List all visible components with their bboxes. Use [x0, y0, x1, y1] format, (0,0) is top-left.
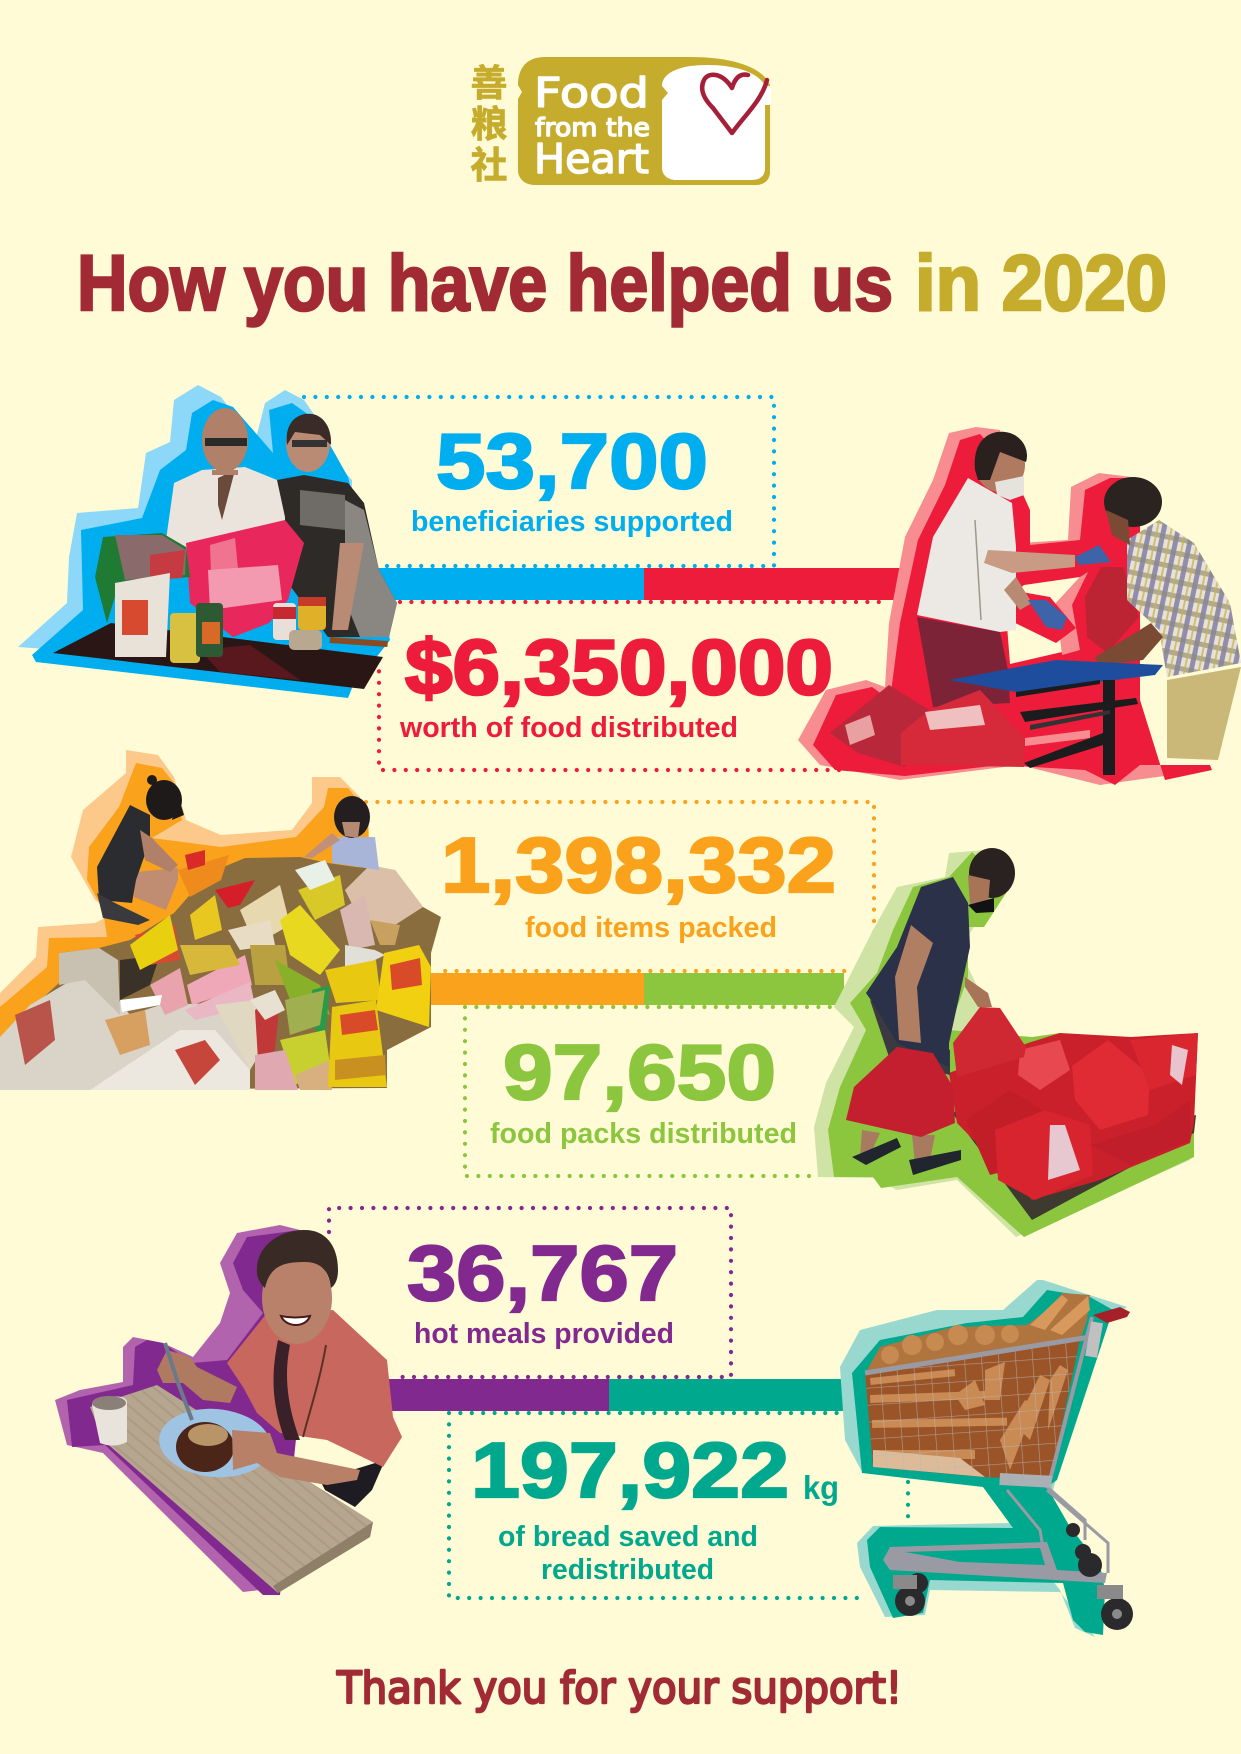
photo: couple with food bag on blue backing: [18, 385, 397, 698]
title: in 2020: [915, 238, 1167, 327]
logo: Food from the Heart: [470, 53, 771, 189]
woman: [277, 475, 397, 637]
lower dark clothing: [320, 1460, 385, 1507]
panel: $6,350,000 food: [379, 602, 880, 770]
kneeling woman: [134, 868, 178, 910]
closing message: Thank you for your support!: [336, 1663, 902, 1714]
smile: [281, 1316, 310, 1325]
pile base: [0, 857, 441, 1090]
bread on top: [865, 1293, 1090, 1373]
arms: [232, 1430, 360, 1485]
reaching woman: [332, 837, 379, 870]
man head and mask: [969, 848, 1015, 898]
trolley frame: [865, 1317, 1108, 1573]
carried bag: [1085, 567, 1139, 653]
panel: 36,767 hot meals: [329, 1208, 731, 1377]
stat label: beneficiaries: beneficiaries supported: [411, 506, 733, 538]
stat label: food value: worth of food distributed: [399, 712, 738, 744]
photo: volunteers handing over food bag on red backing: [798, 427, 1241, 785]
bread in basket: [865, 1340, 1080, 1480]
volunteer head: [975, 438, 1025, 492]
lanyard and apron: [274, 1340, 300, 1440]
recipient shirt: [1127, 520, 1241, 677]
stat number: beneficiaries: 53,700: [436, 417, 708, 505]
table: [949, 660, 1163, 692]
background gap between the two figures: [1005, 577, 1080, 664]
face: [262, 1252, 332, 1344]
stat label: food packs: food packs distributed: [490, 1118, 797, 1150]
shorts and shirt: [870, 1000, 950, 1075]
food bags on floor: [830, 685, 929, 767]
shoes: [852, 1138, 901, 1165]
section 1 connector bar: blue and red: [375, 568, 904, 600]
panel: 53,700 beneficiaries: [304, 397, 774, 566]
food items: [95, 533, 190, 623]
wire mesh: [865, 1340, 1080, 1480]
plastic bags: [0, 975, 250, 1090]
section 3 connector bar: purple and teal: [385, 1379, 845, 1411]
title: How you have helped us: [77, 238, 893, 327]
logo: chinese name: 粮: [470, 94, 508, 148]
photo: shopping trolley full of bread on teal backing: [840, 1280, 1133, 1637]
wheels: [895, 1523, 1133, 1630]
stat number: food value: $6,350,000: [405, 623, 833, 711]
stat number: bread: 197,922: [471, 1426, 789, 1514]
logo: heart: [702, 75, 767, 133]
colourful items: [120, 955, 160, 1000]
pink bag: [186, 520, 304, 637]
volunteer arm and glove: [984, 550, 1075, 573]
trolley handle: [1093, 1307, 1130, 1323]
carried red bags: [846, 1047, 955, 1137]
logo: chinese name: 善: [470, 53, 508, 107]
stat label: bread: [498, 1521, 758, 1586]
man arms: [895, 925, 933, 1043]
stat label: bread: of bread saved and: [498, 1521, 758, 1553]
stat label: food items: food items packed: [525, 912, 777, 944]
panel: 1,398,332 food items: [366, 802, 874, 971]
logo: wordmark: Heart: [534, 135, 649, 183]
stat unit: kg: kg: [803, 1469, 839, 1506]
man: [166, 467, 285, 560]
table: [53, 623, 383, 689]
plate of food: [156, 1404, 274, 1482]
stat number: hot meals: 36,767: [407, 1229, 678, 1317]
logo: wordmark: from the: [535, 113, 650, 142]
stat number: food items: 1,398,332: [441, 821, 836, 909]
yellow boxes: [325, 960, 381, 1003]
man legs: [860, 1130, 880, 1158]
recipient head: [1104, 477, 1162, 527]
mug: [92, 1396, 127, 1446]
photo: smiling woman eating a hot meal on purple backing: [55, 1225, 402, 1595]
fork: [165, 1343, 192, 1420]
stat number: food packs: 97,650: [503, 1028, 776, 1116]
stacked bags: [949, 1033, 1198, 1200]
logo: wordmark: Food: [534, 69, 649, 117]
logo: wordmark: [534, 69, 650, 183]
hair: [257, 1230, 338, 1288]
logo: chinese name: [470, 53, 508, 189]
stat label: bread: redistributed: [541, 1554, 714, 1586]
stat label: hot meals: hot meals provided: [414, 1318, 674, 1350]
volunteer pants: [917, 617, 1010, 707]
shirt: [227, 1310, 402, 1467]
table top: [90, 1385, 373, 1593]
volunteer shirt: [917, 478, 1016, 632]
panel: 197,922 kg bread: [449, 1413, 908, 1598]
pallet: [950, 1110, 1196, 1220]
photo: volunteers packing a pile of food on orange backing: [0, 750, 441, 1090]
recipient pants: [1167, 667, 1241, 760]
crate: [178, 855, 229, 897]
panel: 97,650 food packs: [465, 1007, 835, 1176]
logo: chinese name: 社: [470, 135, 508, 189]
section 2 connector bar: orange and green: [425, 973, 844, 1005]
logo: bread shape: [518, 57, 770, 185]
photo: man carrying red food packs on green backing: [814, 848, 1198, 1237]
